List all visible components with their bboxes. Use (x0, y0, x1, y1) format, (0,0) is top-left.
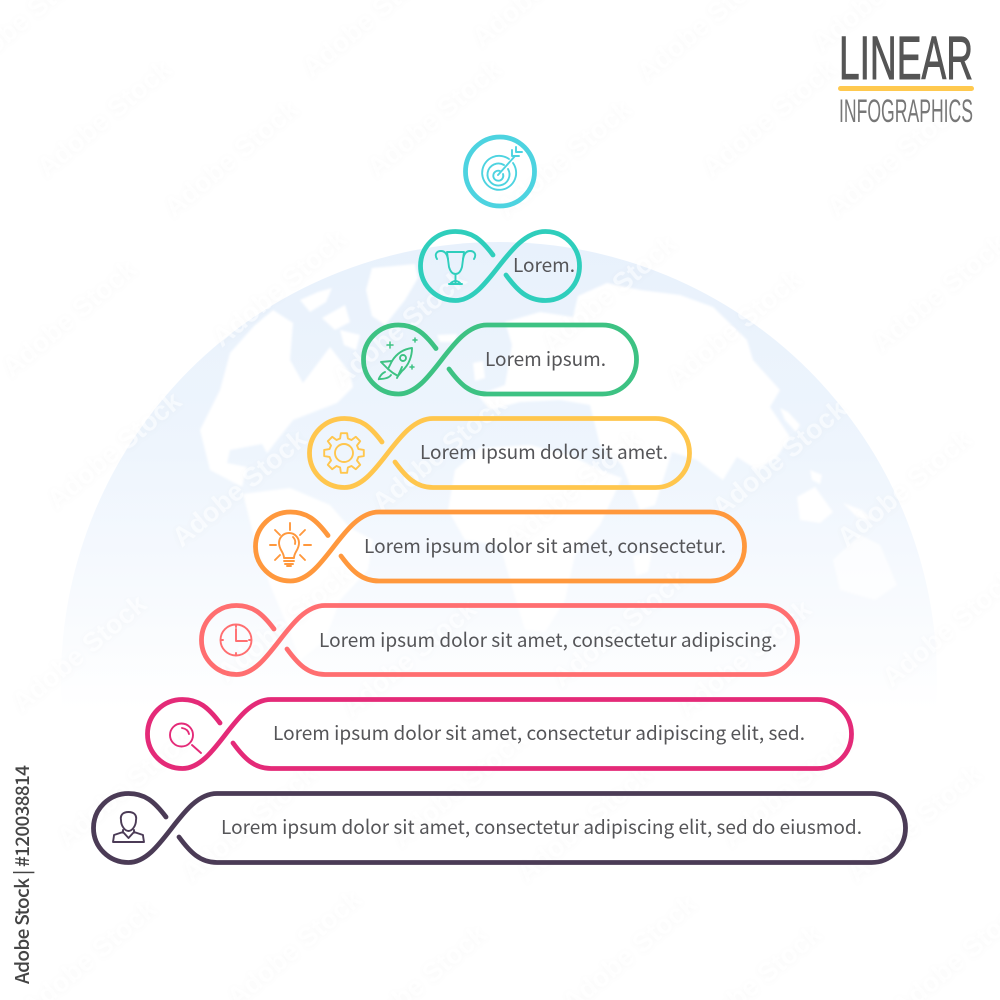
row 1: Lorem. (420, 232, 580, 300)
watermark: Adobe Stock repeated: Adobe Stock (6, 588, 153, 718)
icon: gear (324, 433, 364, 473)
watermark: Adobe Stock repeated: Adobe Stock (41, 385, 188, 515)
watermark: Adobe Stock repeated: Adobe Stock (536, 228, 683, 358)
credit: Adobe Stock number: Adobe Stock | #120038814 (8, 765, 35, 984)
icon: rocket (379, 338, 417, 379)
watermark: Adobe Stock repeated: Adobe Stock (211, 558, 358, 688)
watermark: Adobe Stock repeated: Adobe Stock (546, 563, 693, 693)
watermark: Adobe Stock repeated: Adobe Stock (706, 393, 853, 523)
watermark: Adobe Stock repeated: Adobe Stock (696, 53, 843, 183)
icon: trophy (436, 251, 475, 284)
world globe background (71, 242, 928, 592)
watermark: Adobe Stock repeated: Adobe Stock (31, 53, 178, 183)
row 5: Lorem ipsum dolor sit amet, consectetur adipiscing. (202, 606, 798, 674)
row 3: Lorem ipsum dolor sit amet. (310, 418, 690, 488)
watermark: Adobe Stock repeated: Adobe Stock (51, 723, 198, 853)
row 7: Lorem ipsum dolor sit amet, consectetur adipiscing elit, sed do eiusmod. (94, 794, 906, 862)
icon: person (113, 812, 144, 842)
label: Lorem ipsum. (485, 345, 606, 372)
icon: target with arrow (482, 147, 522, 190)
icon: magnifier (170, 724, 201, 753)
row 4: Lorem ipsum dolor sit amet, consectetur. (256, 512, 744, 581)
watermark: Adobe Stock repeated: Adobe Stock (206, 223, 353, 353)
watermark: Adobe Stock repeated: Adobe Stock (166, 423, 313, 553)
watermark: Adobe Stock repeated: Adobe Stock (361, 53, 508, 183)
watermark: Adobe Stock repeated: Adobe Stock (336, 593, 483, 723)
label: Lorem ipsum dolor sit amet, consectetur adipiscing elit, sed. (273, 719, 805, 746)
watermark: Adobe Stock repeated: Adobe Stock (661, 263, 808, 393)
label: Lorem ipsum dolor sit amet, consectetur adipiscing. (319, 626, 777, 653)
label: Lorem ipsum dolor sit amet, consectetur adipiscing elit, sed do eiusmod. (221, 813, 862, 840)
watermark: Adobe Stock repeated: Adobe Stock (501, 423, 648, 553)
title: Linear Infographics (838, 24, 974, 129)
watermark: Adobe Stock repeated: Adobe Stock (841, 758, 988, 888)
watermark: Adobe Stock repeated: Adobe Stock (386, 723, 533, 853)
icon: light bulb (270, 523, 311, 566)
watermark: Adobe Stock repeated: Adobe Stock (716, 723, 863, 853)
icon: clock (220, 624, 252, 656)
label: Lorem ipsum dolor sit amet, consectetur. (364, 532, 726, 559)
watermark: Adobe Stock repeated: Adobe Stock (366, 388, 513, 518)
row 6: Lorem ipsum dolor sit amet, consectetur adipiscing elit, sed. (148, 700, 852, 768)
watermark: Adobe Stock repeated: Adobe Stock (326, 263, 473, 393)
watermark: Adobe Stock repeated: Adobe Stock (0, 253, 143, 383)
watermark: Adobe Stock repeated: Adobe Stock (176, 758, 323, 888)
label: Lorem. (513, 251, 575, 278)
watermark: Adobe Stock repeated: Adobe Stock (821, 93, 968, 223)
row 2: Lorem ipsum. (364, 325, 636, 394)
watermark: Adobe Stock repeated: Adobe Stock (831, 423, 978, 553)
label: Lorem ipsum dolor sit amet. (420, 438, 668, 465)
watermark: Adobe Stock repeated: Adobe Stock (511, 758, 658, 888)
watermark: Adobe Stock repeated: Adobe Stock (671, 593, 818, 723)
watermark: Adobe Stock repeated: Adobe Stock (491, 93, 638, 223)
watermark: Adobe Stock repeated: Adobe Stock (158, 93, 305, 223)
top circle: target (466, 137, 534, 206)
